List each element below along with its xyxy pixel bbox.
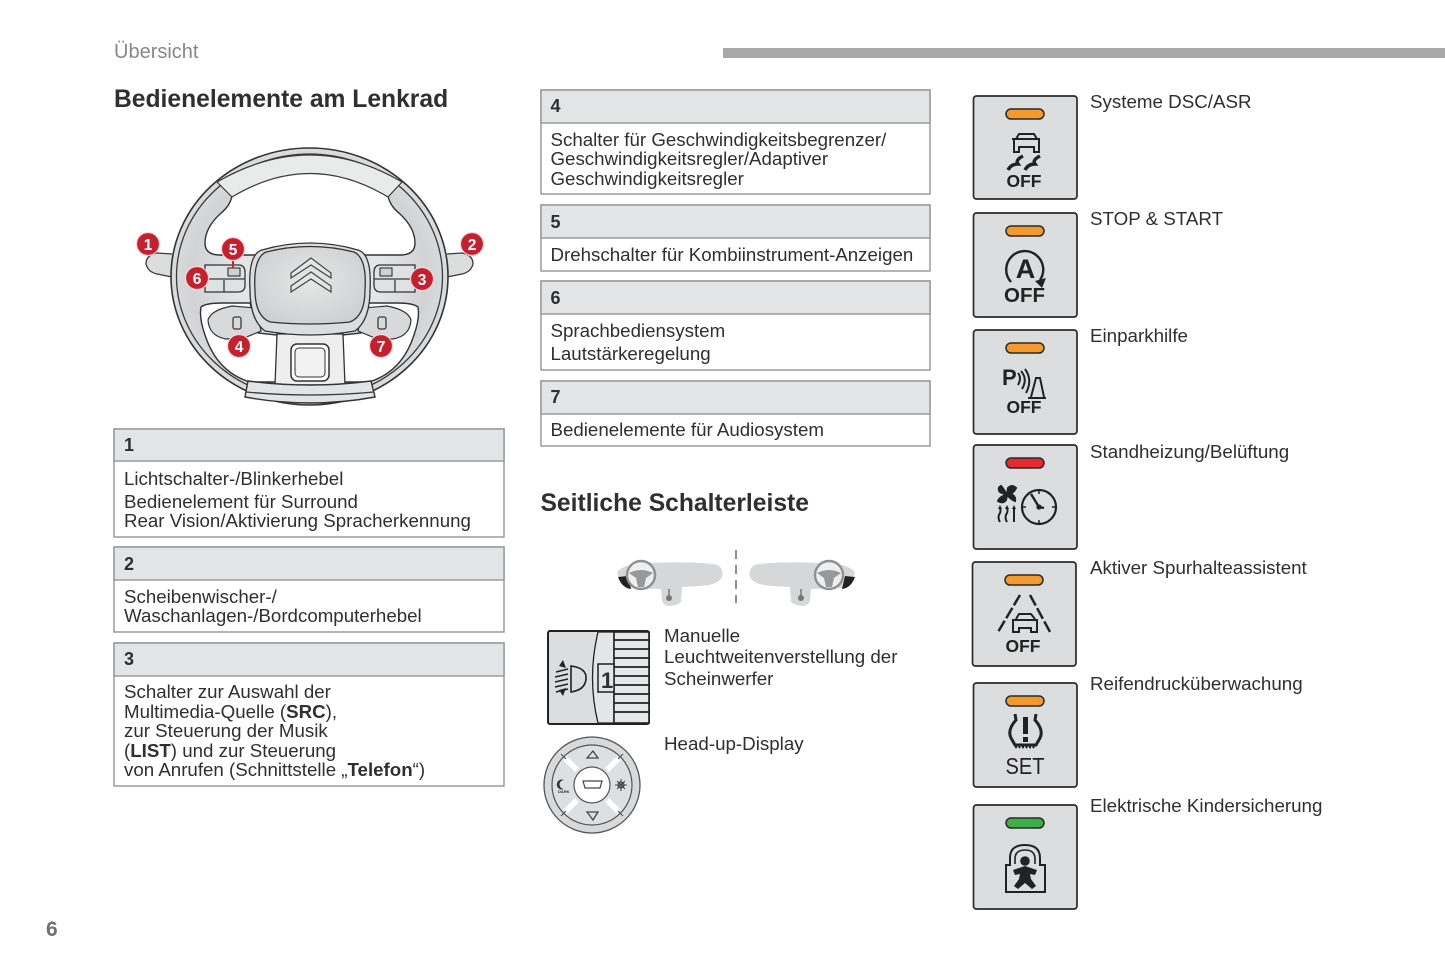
button: park assist off: OFF [1006, 397, 1042, 417]
left black switch strip [618, 576, 631, 589]
chevron logo [291, 258, 331, 292]
left dashboard silhouette [617, 562, 722, 606]
label: heating: Standheizung/Belüftung [1090, 441, 1289, 462]
table 1: Bedienelement für Surround [124, 491, 358, 512]
icon: head-up display control: DARK [558, 789, 570, 794]
heading: side switch strip: Seitliche Schalterleiste [540, 490, 809, 517]
table 2 [114, 547, 504, 632]
page section label: Übersicht [114, 41, 199, 63]
left stem slot [668, 589, 670, 597]
callout 3: 3 [418, 272, 427, 289]
callout 1 [136, 232, 160, 256]
right spoke buttons [374, 265, 415, 292]
callout 7 [370, 334, 392, 358]
label: child lock: Elektrische Kindersicherung [1090, 795, 1322, 816]
table 6: Lautstärkeregelung [550, 343, 711, 364]
table 7 [541, 381, 930, 446]
table 1: Lichtschalter-/Blinkerhebel [124, 468, 343, 489]
callout 5 [222, 238, 244, 268]
button: DSC/ASR off [974, 96, 1077, 199]
lower spoke [275, 334, 345, 385]
table 7: Bedienelemente für Audiosystem [550, 419, 824, 440]
button: lane keep assist off: OFF [1006, 636, 1041, 656]
callout 6: 6 [193, 271, 202, 288]
table 4: Geschwindigkeitsregler [550, 168, 744, 189]
button: tyre pressure set: SET [1006, 753, 1044, 779]
right wheel icon [815, 561, 843, 589]
table 3: zur Steuerung der Musik [124, 720, 328, 741]
button: stop and start off: A [1016, 254, 1035, 284]
table 1: 1 [124, 435, 134, 455]
icon: headlamp adjustment wheel [548, 631, 649, 724]
button: park assist off: P [1002, 365, 1017, 390]
left wheel icon [627, 561, 655, 589]
left spoke buttons [205, 265, 245, 292]
table 3: Multimedia-Quelle (SRC), [124, 701, 337, 722]
callout 2 [460, 232, 484, 256]
label: DSC/ASR: Systeme DSC/ASR [1090, 91, 1252, 112]
label: tyre pressure: Reifendrucküberwachung [1090, 673, 1303, 694]
callout 3 [410, 268, 434, 290]
table 4: 4 [550, 96, 561, 116]
side strip location diagram [617, 550, 855, 606]
airbag pad [255, 246, 365, 324]
button: stop and start off [974, 213, 1077, 317]
callout 1: 1 [144, 237, 153, 254]
top rim grip band [217, 155, 402, 197]
table 3: (LIST) und zur Steuerung [124, 740, 336, 761]
heading: steering wheel controls: Bedienelemente am Lenkrad [114, 86, 448, 113]
steering wheel diagram [136, 148, 484, 405]
callout 4 [228, 334, 250, 358]
left stalk [146, 253, 172, 277]
table 3: Schalter zur Auswahl der [124, 681, 331, 702]
table 1 [114, 429, 504, 537]
table 2: 2 [124, 554, 134, 574]
side strip text: headlamp: Leuchtweitenverstellung der [664, 646, 897, 667]
right dashboard silhouette [750, 562, 855, 606]
table 5: 5 [550, 212, 561, 232]
table 2: Waschanlagen-/Bordcomputerhebel [124, 605, 422, 626]
callout 6 [186, 266, 208, 290]
table 3 [114, 643, 504, 786]
table 2: Scheibenwischer-/ [124, 586, 278, 607]
table 4: Geschwindigkeitsregler/Adaptiver [550, 148, 828, 169]
lower right opening [342, 303, 418, 382]
left lower switch [208, 306, 261, 339]
button: heating and ventilation timer [974, 445, 1077, 549]
right black switch strip [842, 576, 855, 589]
airbag outer [250, 243, 370, 335]
upper opening [205, 172, 415, 255]
table 6 [541, 281, 930, 370]
table 3: von Anrufen (Schnittstelle „Telefon“) [124, 759, 425, 780]
table 1: Rear Vision/Aktivierung Spracherkennung [124, 510, 471, 531]
label: stop and start: STOP & START [1090, 208, 1224, 229]
button: lane keep assist off [972, 562, 1076, 666]
table 4: Schalter für Geschwindigkeitsbegrenzer/ [550, 129, 887, 150]
callout 7: 7 [377, 339, 385, 356]
bottom band [245, 381, 375, 403]
side strip text: head-up display: Head-up-Display [664, 733, 804, 754]
table 6: 6 [550, 288, 561, 308]
table 3: 3 [124, 649, 134, 669]
divider [735, 550, 737, 603]
lower left opening [200, 303, 277, 382]
table 4 [541, 90, 930, 194]
button: tyre pressure set [974, 683, 1077, 787]
table 7: 7 [550, 387, 561, 407]
callout 5: 5 [229, 242, 238, 259]
icon: headlamp adjustment wheel: 1 [601, 668, 613, 693]
header bar [723, 48, 1445, 58]
table 5: Drehschalter für Kombiinstrument-Anzeigen [550, 244, 913, 265]
wheel rim [171, 148, 448, 405]
callout 4: 4 [235, 339, 244, 356]
button: child safety lock [974, 805, 1077, 909]
button: DSC/ASR off: OFF [1006, 171, 1042, 191]
right stalk [447, 253, 473, 277]
table 6: Sprachbediensystem [550, 320, 725, 341]
table 5 [541, 205, 930, 271]
side strip text: headlamp: Manuelle [664, 625, 740, 646]
callout 2: 2 [468, 237, 476, 254]
side strip text: headlamp [664, 625, 897, 689]
right lower switch [358, 306, 411, 339]
label: lane keep assist: Aktiver Spurhalteassistent [1090, 557, 1308, 578]
button: stop and start off: OFF [1004, 284, 1045, 307]
right stem slot [800, 589, 802, 597]
page number: 6 [46, 918, 58, 941]
button: park assist off [974, 330, 1077, 434]
lower spoke window [291, 344, 329, 381]
side strip text: headlamp: Scheinwerfer [664, 668, 773, 689]
label: park assist: Einparkhilfe [1090, 325, 1188, 346]
icon: head-up display control [544, 737, 640, 833]
